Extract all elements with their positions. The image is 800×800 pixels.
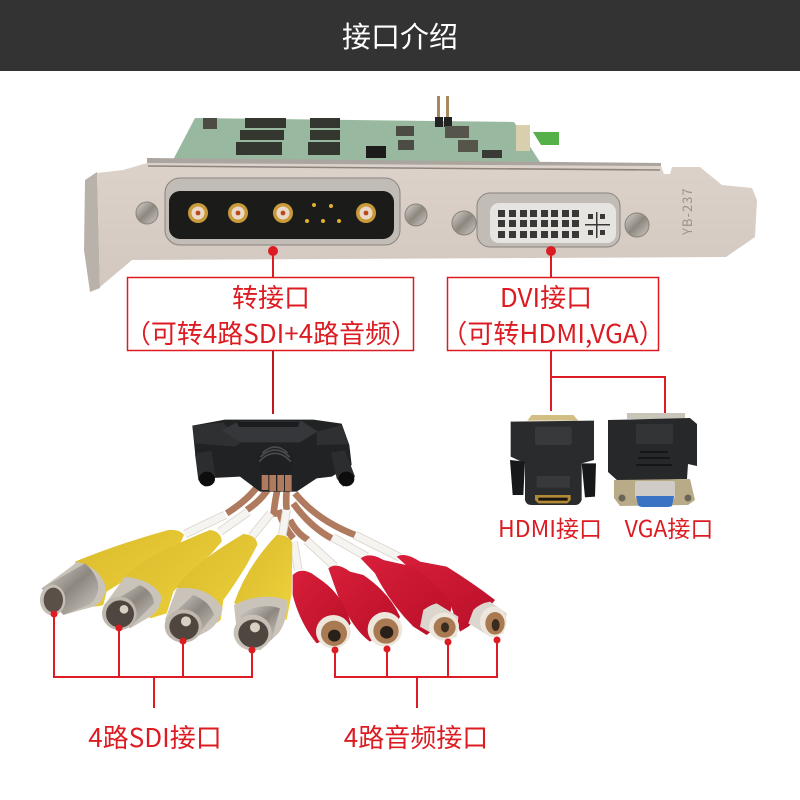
audio plugs xyxy=(293,555,507,648)
metal bracket: YB-237 xyxy=(677,187,696,236)
breakout cables xyxy=(185,475,400,570)
label: 4 SDI: 4路SDI接口 xyxy=(88,718,222,755)
mounting screws xyxy=(136,202,649,237)
HDMI adapter xyxy=(510,415,596,505)
bracket: 4 audio ports xyxy=(332,636,500,708)
connector head xyxy=(192,420,355,492)
port: DVI xyxy=(477,193,620,247)
callout: DVI label: （可转HDMI,VGA） xyxy=(441,314,665,351)
capture card photo xyxy=(84,96,757,292)
plug 2 xyxy=(328,566,402,647)
title bar: 接口介绍 xyxy=(342,14,458,56)
plug 2 xyxy=(102,530,222,630)
callout: multi-pin label xyxy=(125,246,417,414)
callout: DVI label: DVI接口 xyxy=(500,278,592,315)
BNC plugs xyxy=(40,530,292,651)
metal bracket xyxy=(84,158,757,292)
label: 4 audio: 4路音频接口 xyxy=(344,718,488,755)
VGA adapter xyxy=(608,413,697,507)
circuit board xyxy=(173,96,559,162)
adapter labels: VGA接口 xyxy=(625,510,713,544)
plug 3 xyxy=(165,534,257,643)
plug 4 xyxy=(397,555,507,637)
plug 3 xyxy=(361,555,459,641)
adapter labels xyxy=(498,510,713,544)
callout: multi-pin label: 转接口 xyxy=(232,278,310,315)
adapter labels: HDMI接口 xyxy=(498,510,602,544)
callout: DVI label xyxy=(441,246,665,413)
port: multi-pin connector xyxy=(165,178,400,245)
callout: multi-pin label: （可转4路SDI+4路音频） xyxy=(125,314,417,351)
bracket: 4 SDI ports xyxy=(50,610,256,708)
plug 4 xyxy=(234,535,292,651)
plug 1 xyxy=(293,571,351,648)
plug 1 xyxy=(40,530,184,615)
title bar xyxy=(0,0,800,71)
